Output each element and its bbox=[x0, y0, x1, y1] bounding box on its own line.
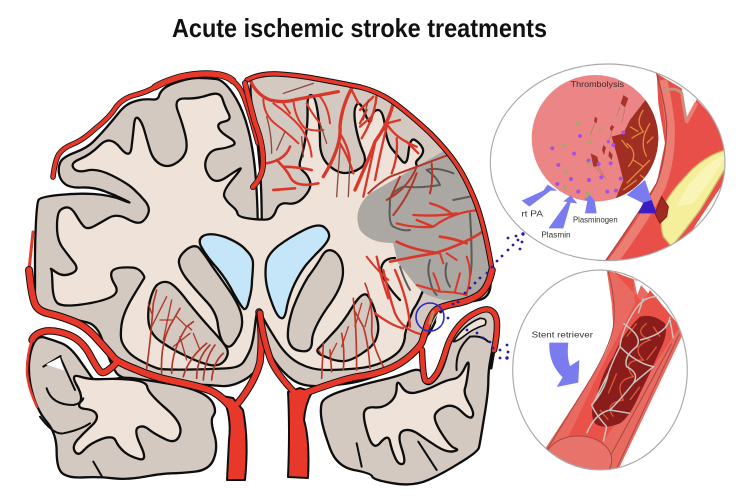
right putamen bbox=[317, 294, 378, 361]
left lenticulostriate arteries bbox=[147, 290, 223, 380]
right cerebral cortex bbox=[251, 74, 491, 386]
inset outline bbox=[513, 270, 687, 470]
left top artery bbox=[29, 74, 258, 270]
insular artery branches bbox=[375, 257, 425, 335]
right arteries and carotid trunk bbox=[247, 74, 497, 478]
cortical artery branches bbox=[250, 80, 485, 295]
inset vessel with plaque bbox=[603, 73, 733, 263]
left caudate bbox=[179, 246, 242, 347]
arrow: Plasmin bbox=[548, 195, 577, 228]
label: Plasmin: Plasmin bbox=[541, 230, 571, 240]
occlusion site marker bbox=[416, 303, 444, 331]
magnified lumen bbox=[532, 75, 658, 202]
dotted connector: stent retriever bbox=[447, 317, 509, 360]
label: Stent retriever: Stent retriever bbox=[532, 330, 593, 340]
infarct territory bbox=[357, 149, 491, 300]
label: Thrombolysis: Thrombolysis bbox=[571, 79, 624, 89]
medial artery bbox=[245, 83, 263, 187]
left temporal lobe bbox=[29, 337, 216, 479]
left arteries and carotid trunk bbox=[27, 270, 261, 480]
thrombolytic particles bbox=[550, 131, 625, 194]
thrombus bbox=[590, 95, 662, 200]
insular sulcus lines bbox=[381, 258, 400, 300]
inset vessel with clot and stent bbox=[546, 270, 682, 470]
inset: stent retriever bbox=[513, 270, 687, 484]
brain coronal section bbox=[27, 74, 497, 484]
right caudate bbox=[288, 250, 343, 351]
label: rt PA: rt PA bbox=[521, 209, 544, 219]
title: Acute ischemic stroke treatments bbox=[172, 13, 547, 43]
clearing around lens bbox=[527, 70, 663, 207]
right ventricle bbox=[266, 226, 329, 318]
inset: thrombolysis bbox=[490, 64, 733, 263]
arrow: clot magnification bbox=[627, 180, 657, 213]
inset outline bbox=[490, 64, 725, 261]
label: Plasminogen: Plasminogen bbox=[573, 214, 618, 224]
arrow: Plasminogen bbox=[584, 195, 597, 213]
arrow: rt PA bbox=[522, 185, 557, 207]
arrow: stent direction bbox=[549, 343, 579, 387]
right temporal lobe bbox=[321, 309, 495, 484]
white matter bbox=[51, 94, 472, 370]
left putamen bbox=[148, 282, 228, 365]
left ventricle bbox=[200, 234, 253, 309]
right lenticulostriate arteries bbox=[318, 283, 383, 378]
arrow overlap bbox=[638, 200, 657, 213]
plasminogen particles bbox=[562, 121, 602, 195]
left cerebral cortex bbox=[35, 78, 264, 386]
dotted connector: thrombolysis bbox=[452, 232, 525, 305]
